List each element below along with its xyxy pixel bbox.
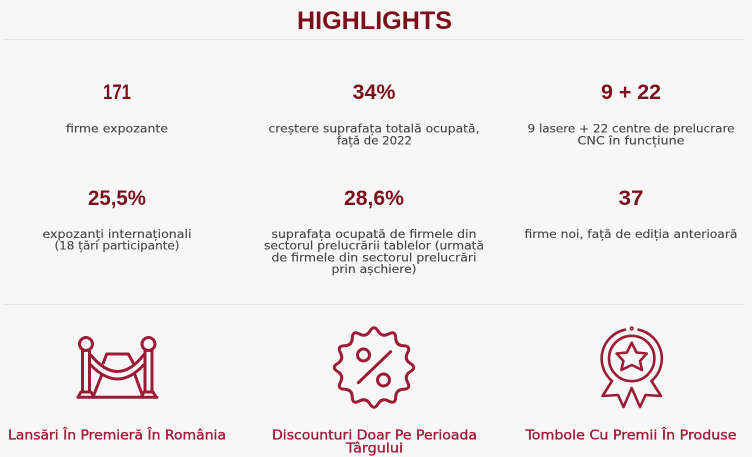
- stat: 37: [524, 186, 738, 241]
- title: HIGHLIGHTS: [297, 7, 452, 35]
- stat: 171 firme expozante: [66, 80, 168, 135]
- stat: 34%: față de 2022: [337, 133, 412, 147]
- stat: 9 + 22: 9 + 22: [601, 80, 661, 104]
- stat: 9 + 22: 9 lasere + 22 centre de prelucrare: [528, 121, 734, 135]
- stat: 34%: creștere suprafața totală ocupată,: [268, 121, 480, 135]
- stat: 25,5%: expozanți internaționali: [42, 227, 192, 241]
- stat: 28,6%: de firmele din sectorul prelucrări: [272, 250, 476, 264]
- stat: 9 + 22: CNC în funcțiune: [578, 133, 684, 147]
- caption: discounts: Discounturi Doar Pe Perioada: [272, 428, 477, 444]
- stat: 171 firme expozante: 171: [103, 80, 131, 104]
- icon: red carpet with stanchions: [78, 338, 157, 397]
- stat: 37: firme noi, față de ediția anterioară: [524, 227, 738, 241]
- stat: 28,6%: sectorul prelucrării tablelor (urmată: [264, 238, 484, 252]
- stat: 25,5%: (18 țări participante): [54, 238, 180, 252]
- caption: launches: Lansări În Premieră În România: [8, 428, 226, 444]
- stat: 171 firme expozante: firme expozante: [66, 121, 168, 135]
- stat: 34%: [268, 80, 480, 147]
- stat: 25,5%: 25,5%: [88, 186, 146, 210]
- stat: 25,5%: [42, 186, 192, 252]
- stat: 28,6%: prin așchiere): [332, 262, 416, 276]
- stat: 37: 37: [618, 186, 644, 210]
- stat: 28,6%: [264, 186, 484, 276]
- icon: discount badge: [334, 328, 414, 407]
- stat: 34%: 34%: [352, 80, 396, 104]
- caption: discounts: Târgului: [345, 442, 403, 457]
- caption: raffles: Tombole Cu Premii În Produse: [524, 428, 736, 444]
- stat: 28,6%: suprafața ocupată de firmele din: [272, 227, 476, 241]
- caption: discounts: [272, 428, 477, 457]
- stat: 9 + 22: [528, 80, 734, 147]
- icon: award rosette: [602, 328, 662, 407]
- stat: 28,6%: 28,6%: [344, 186, 404, 210]
